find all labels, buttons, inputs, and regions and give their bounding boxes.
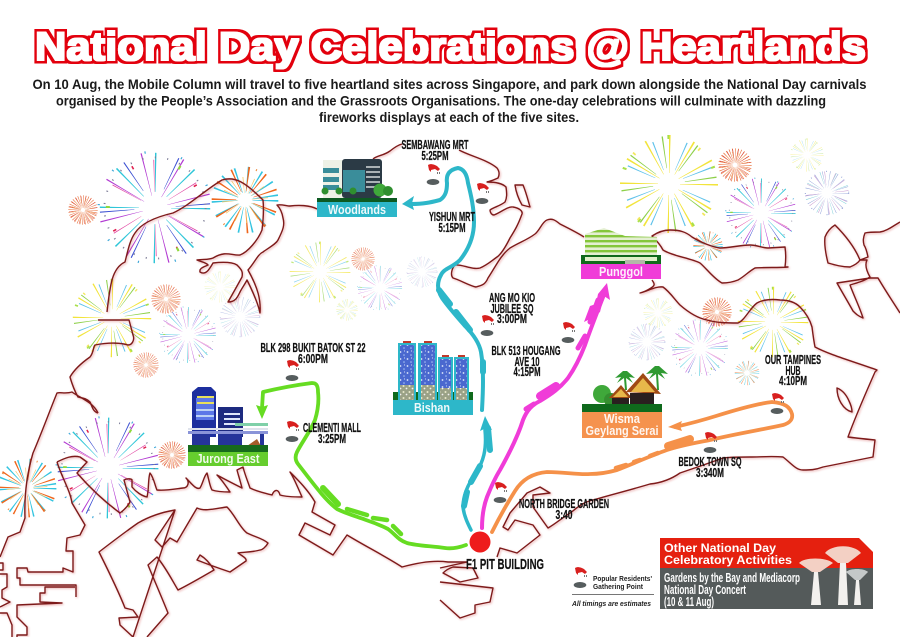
label: Bukit Batok: 6:00PM <box>298 351 328 366</box>
building: Woodlands <box>317 159 397 217</box>
label: Bukit Batok <box>260 340 366 366</box>
building: Wisma Geylang Serai: Geylang Serai <box>586 424 658 438</box>
panel body text: National Day Concert <box>664 582 746 597</box>
label: Clementi Mall <box>303 420 361 446</box>
label: Ang Mo Kio: 3:00PM <box>497 311 527 326</box>
fireworks <box>0 137 849 519</box>
label: Hougang: 4:15PM <box>514 364 540 379</box>
building: Jurong East: Jurong East <box>196 452 260 466</box>
building: Bishan: Bishan <box>414 401 450 415</box>
label: Ang Mo Kio: JUBILEE SQ <box>490 301 534 316</box>
label: Bukit Batok: BLK 298 BUKIT BATOK ST 22 <box>260 340 366 355</box>
panel body text: Gardens by the Bay and Mediacorp <box>664 570 800 585</box>
intro text: On 10 Aug, the Mobile Column will travel to five heartland sites across Singapore, and park down alongside the National Day carnivals <box>32 76 867 92</box>
title: National Day Celebrations @ Heartlands <box>35 25 866 69</box>
label: Our Tampines Hub: OUR TAMPINES <box>765 352 821 367</box>
legend: Gathering Point <box>593 584 644 591</box>
label: Ang Mo Kio: ANG MO KIO <box>489 290 535 305</box>
label: Bedok Town Sq: BEDOK TOWN SQ <box>678 454 742 469</box>
label: Our Tampines Hub <box>765 352 821 388</box>
label: Bedok Town Sq: 3:340M <box>696 465 724 480</box>
panel body text <box>664 570 800 609</box>
panel heading: Other National Day <box>664 543 777 555</box>
route: Jurong East (green) <box>256 383 466 548</box>
intro text: fireworks displays at each of the five sites. <box>319 109 579 125</box>
building: Punggol: Punggol <box>599 265 643 279</box>
panel: other activities <box>660 538 873 609</box>
route: Wisma Geylang Serai (orange) <box>492 402 792 532</box>
gathering point markers <box>286 164 784 503</box>
route: Woodlands (teal) <box>402 168 492 530</box>
intro text <box>32 76 867 125</box>
label: Hougang: BLK 513 HOUGANG <box>492 343 560 358</box>
label: North Bridge Garden: 3:40 <box>556 507 572 522</box>
label: Yishun MRT <box>429 209 475 235</box>
building: Bishan <box>393 341 473 415</box>
legend <box>571 567 654 608</box>
route: Punggol (magenta) <box>482 283 610 528</box>
label: North Bridge Garden: NORTH BRIDGE GARDEN <box>519 496 609 511</box>
label: Sembawang MRT <box>402 137 469 163</box>
building: Woodlands: Woodlands <box>328 203 386 217</box>
panel heading <box>664 543 792 567</box>
label: Sembawang MRT: 5:25PM <box>422 148 448 163</box>
icon: supertrees <box>799 546 868 605</box>
building: Punggol <box>581 228 661 279</box>
label: Yishun MRT: 5:15PM <box>438 220 466 235</box>
label: North Bridge Garden <box>519 496 609 522</box>
label: Clementi Mall: 3:25PM <box>318 431 346 446</box>
label: Clementi Mall: CLEMENTI MALL <box>303 420 361 435</box>
legend: All timings are estimates <box>571 601 651 608</box>
building: Wisma Geylang Serai <box>582 366 668 438</box>
label: Hougang: AVE 10 <box>514 354 540 369</box>
building: Wisma Geylang Serai: Wisma <box>604 412 641 426</box>
panel heading: Celebratory Activities <box>664 555 792 567</box>
label: Hougang <box>492 343 560 379</box>
start point: F1 Pit Building: F1 PIT BUILDING <box>466 556 544 573</box>
start point: F1 Pit Building <box>466 532 544 573</box>
location labels <box>260 137 821 522</box>
panel body text: (10 & 11 Aug) <box>664 594 714 609</box>
label: Ang Mo Kio <box>489 290 535 326</box>
label: Our Tampines Hub: 4:10PM <box>779 373 807 388</box>
label: Our Tampines Hub: HUB <box>786 363 800 378</box>
intro text: organised by the People’s Association and the Grassroots Organisations. The one-day celebrations will culminate with dazzling <box>56 92 826 108</box>
label: Bedok Town Sq <box>678 454 742 480</box>
label: Sembawang MRT: SEMBAWANG MRT <box>402 137 469 152</box>
label: Yishun MRT: YISHUN MRT <box>429 209 475 224</box>
map coastline <box>0 144 900 637</box>
legend: Popular Residents' <box>593 576 652 583</box>
building: Jurong East <box>188 387 268 466</box>
